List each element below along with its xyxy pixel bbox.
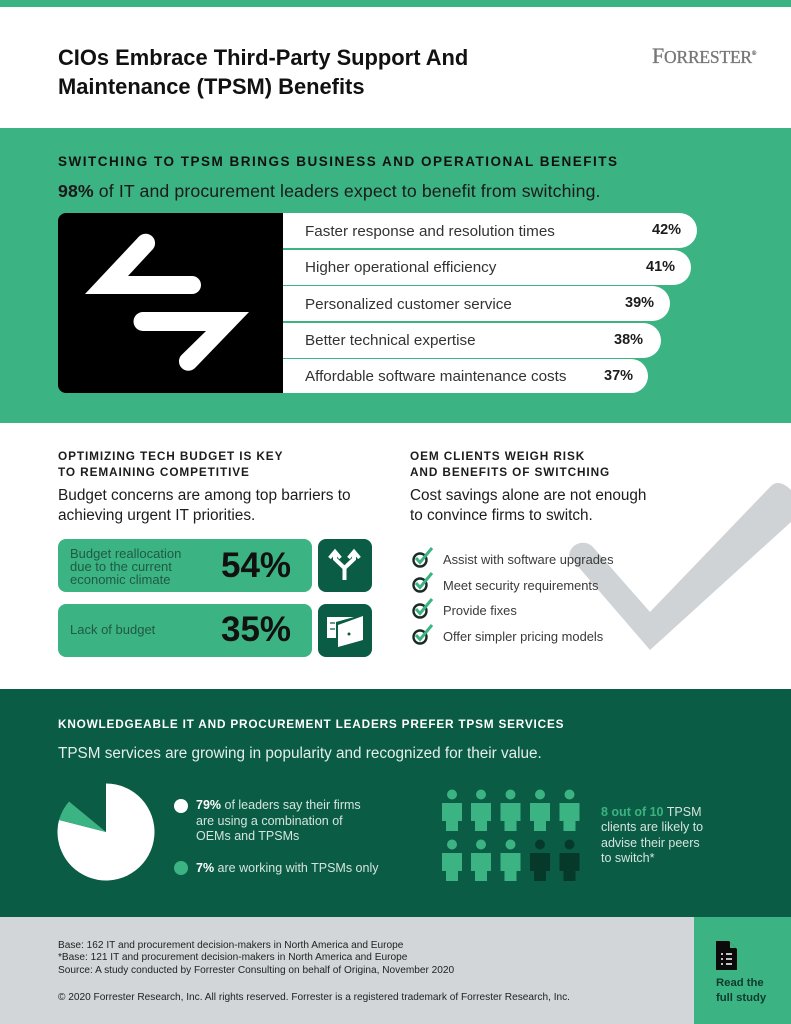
footnotes: Base: 162 IT and procurement decision-makers in North America and Europe [58,940,403,950]
copyright: © 2020 Forrester Research, Inc. All rights reserved. Forrester is a registered trademark of Forrester Research, Inc. [58,992,570,1002]
stat label [70,546,181,586]
text: 8 out of 10: advise their peers [601,836,700,850]
stat value: 35% [221,610,291,648]
text: budget concerns: Budget concerns are among top barriers to [58,487,351,504]
legend text: 79%: OEMs and TPSMs [196,829,299,843]
check icon 3 [412,598,434,619]
read study text: Read the [716,977,764,989]
icon: diverging arrows [318,539,372,592]
footnotes: Source: A study conducted by Forrester Consulting on behalf of Origina, November 2020 [58,965,454,976]
legend dot: white [174,799,188,813]
bar: operational efficiency: 41% [646,258,675,274]
bar: customer service: Personalized customer service [305,296,512,312]
read study text [716,977,766,1004]
heading: OEM clients: OEM CLIENTS WEIGH RISK [410,449,585,463]
bar: operational efficiency [283,250,691,284]
heading: OEM clients: AND BENEFITS OF SWITCHING [410,465,610,479]
stat label: Budget reallocation [70,546,181,560]
top accent strip [0,0,791,7]
footnotes: *Base: 121 IT and procurement decision-makers in North America and Europe [58,952,407,963]
title: Maintenance (TPSM) Benefits [58,74,365,98]
preference subheading: TPSM services are growing in popularity and recognized for their value. [58,744,542,762]
bar: customer service: 39% [625,295,654,311]
check icon 4 [412,624,434,645]
legend text: 79%: 79% of leaders say their firms [196,798,361,812]
benefits subheading: 98% of IT and procurement leaders expect to benefit from switching. [58,180,601,200]
text: 8 out of 10: to switch* [601,851,654,865]
stat label: due to the current [70,558,172,574]
preference heading: KNOWLEDGEABLE IT AND PROCUREMENT LEADERS PREFER TPSM SERVICES [58,717,564,731]
bar: software maintenance costs [283,359,648,393]
text: 8 out of 10 [601,804,703,865]
bar: customer service [283,286,670,321]
bar: technical expertise: Better technical expertise [305,332,476,349]
icon: document [716,941,737,970]
people pictogram: 8 of 10 [442,790,580,881]
text: budget concerns [58,487,351,524]
Forrester logo: FORRESTER® [652,43,756,68]
heading: OEM clients [410,449,610,479]
stat label: economic climate [70,572,170,586]
legend text: 7%: 7% are working with TPSMs only [196,861,378,875]
panel: footer [0,917,694,1024]
text: cost savings: Cost savings alone are not enough [410,487,646,504]
text: cost savings: to convince firms to switch. [410,507,593,524]
stat label: Lack of budget [70,622,155,637]
title [58,45,468,98]
legend text: 79%: are using a combination of [196,814,343,828]
bar: technical expertise [283,322,661,358]
heading: tech budget: OPTIMIZING TECH BUDGET IS KEY [58,449,283,463]
panel: read the full study [694,917,791,1024]
bar: faster response [283,213,697,248]
bar: faster response: Faster response and resolution times [305,222,555,240]
read study text: full study [716,992,766,1004]
list item: Provide fixes [443,603,517,618]
footnotes [58,940,454,976]
panel: TPSM preference [0,689,791,917]
text: budget concerns: achieving urgent IT priorities. [58,507,255,524]
bar: faster response: 42% [652,222,681,238]
text: 8 out of 10: clients are likely to [601,820,703,834]
check icon 2 [412,572,434,593]
title: CIOs Embrace Third-Party Support And [58,45,468,70]
heading: tech budget: TO REMAINING COMPETITIVE [58,465,250,479]
bar: software maintenance costs: 37% [604,368,633,384]
list item: Meet security requirements [443,578,598,592]
list item: Offer simpler pricing models [443,629,603,644]
icon panel: switching arrows [58,213,283,393]
list item: Assist with software upgrades [443,552,614,566]
benefits heading: SWITCHING TO TPSM BRINGS BUSINESS AND OPERATIONAL BENEFITS [58,154,619,169]
pie chart [58,784,154,880]
check icon 1 [412,547,434,568]
bar: operational efficiency: Higher operational efficiency [305,259,496,276]
text: 8 out of 10: 8 out of 10 TPSM [601,804,702,818]
panel: business and operational benefits [0,128,791,423]
bar: technical expertise: 38% [614,332,643,348]
large grey check mark [569,483,791,650]
stat value: 54% [221,546,291,585]
text: cost savings [410,487,646,524]
icon: open door wallet [318,604,372,657]
heading: tech budget [58,449,283,479]
legend text: 79% [196,798,361,843]
legend dot: green [174,861,188,875]
stat: lack of budget [58,604,312,657]
stat: budget reallocation [58,539,312,592]
bar: software maintenance costs: Affordable software maintenance costs [305,368,566,385]
